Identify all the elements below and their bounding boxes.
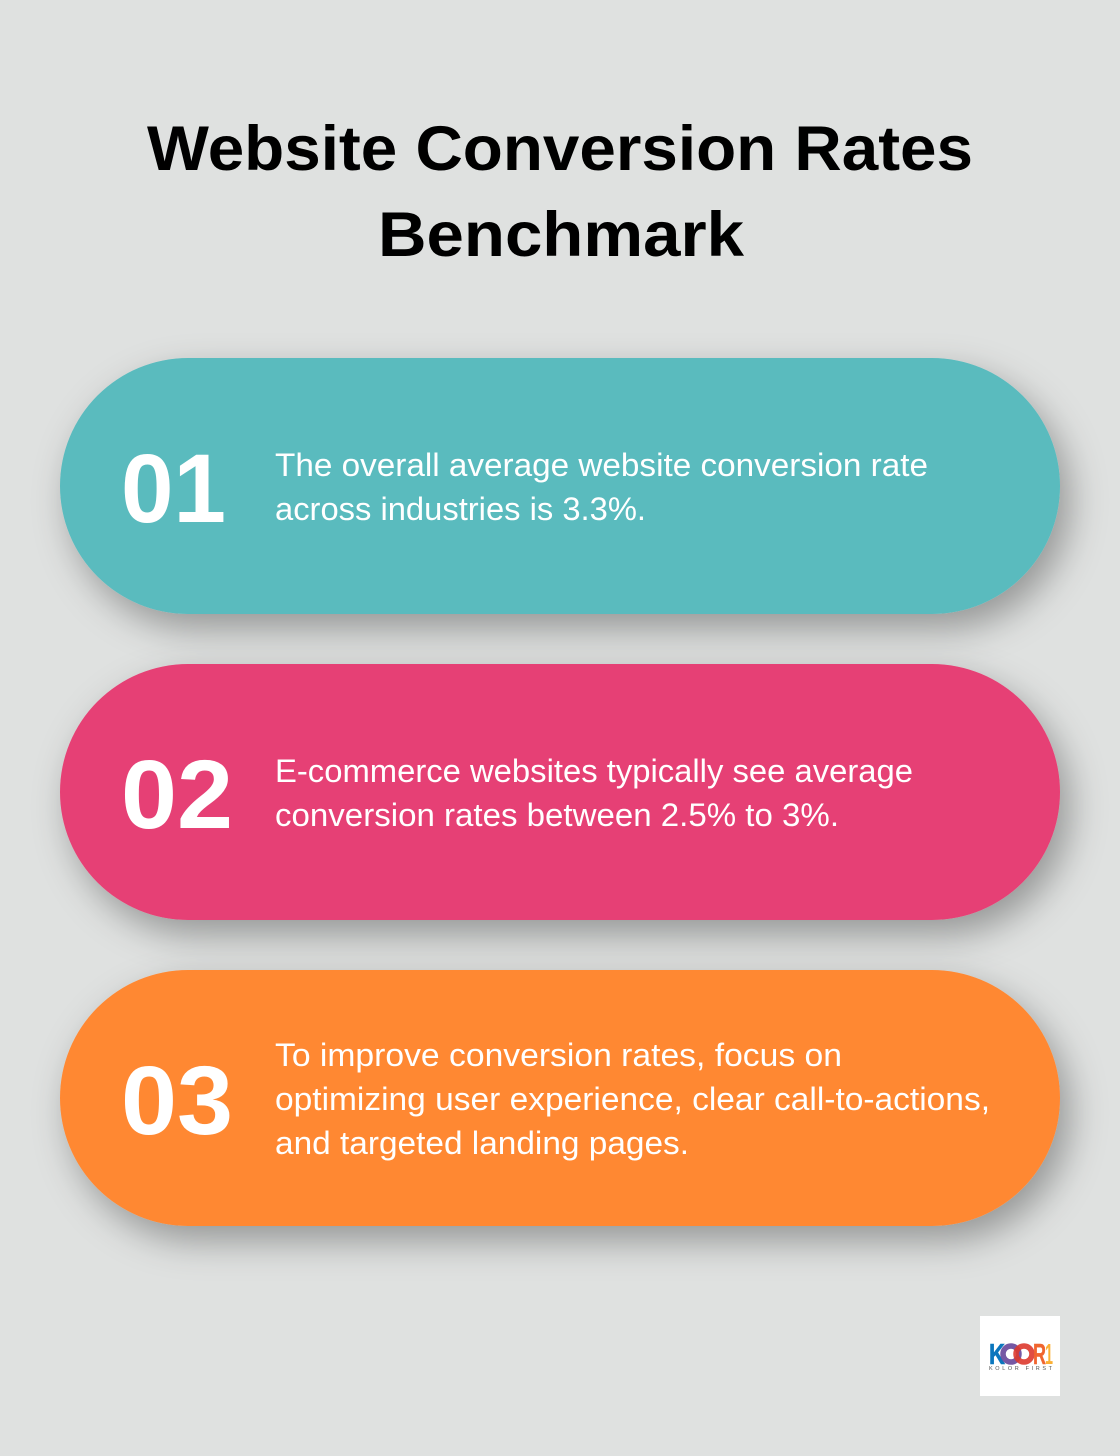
title: Benchmark: [378, 200, 745, 270]
text: card 03: optimizing user experience, clear call-to-actions,: [275, 1081, 990, 1117]
logo: K: [989, 1339, 1005, 1371]
text: card 03: and targeted landing pages.: [275, 1125, 689, 1161]
number 01: 01: [121, 434, 226, 543]
text: card 02: conversion rates between 2.5% to 3%.: [275, 797, 839, 833]
text: card 02: [275, 753, 913, 833]
text: card 03: [275, 1037, 990, 1161]
number 03: 03: [121, 1046, 233, 1155]
number 02: 02: [121, 740, 233, 849]
text: card 01: [275, 447, 928, 527]
logo: KOLOR FIRST: [989, 1366, 1053, 1372]
logo: R: [1033, 1339, 1046, 1371]
logo: 1: [1045, 1339, 1053, 1371]
logo: [980, 1316, 1060, 1396]
panel: card 02: [60, 664, 1060, 920]
panel: card 01: [60, 358, 1060, 614]
text: card 02: E-commerce websites typically see average: [275, 753, 913, 789]
text: card 01: across industries is 3.3%.: [275, 491, 646, 527]
text: card 01: The overall average website conversion rate: [275, 447, 928, 483]
text: card 03: To improve conversion rates, focus on: [275, 1037, 842, 1073]
title: [147, 114, 973, 270]
panel: card 03: [60, 970, 1060, 1226]
title: Website Conversion Rates: [147, 114, 973, 184]
